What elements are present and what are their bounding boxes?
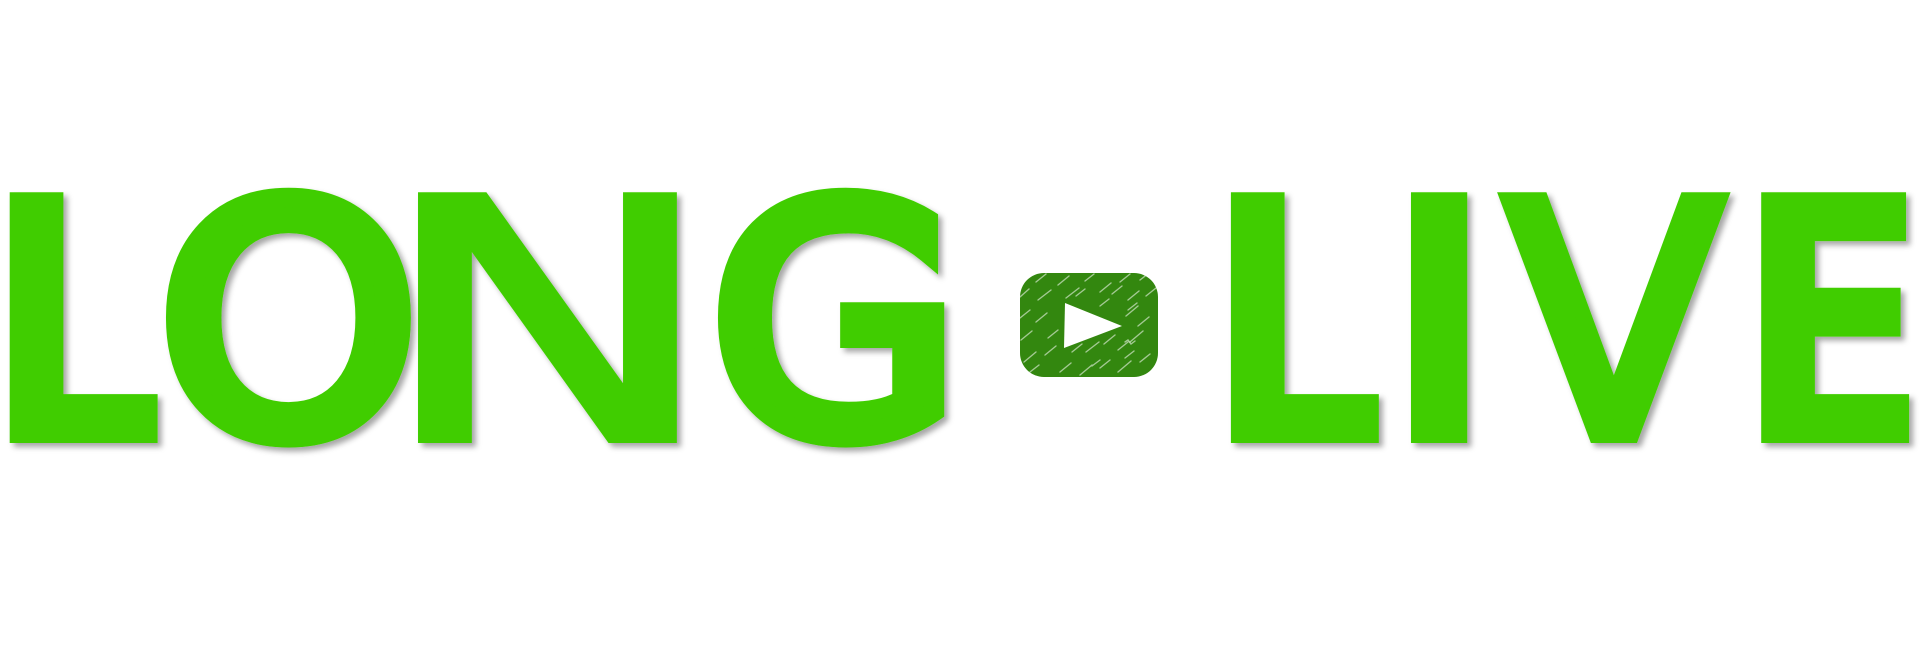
heading word: LIVE: V	[1506, 137, 1723, 512]
heading word: LIVE	[1205, 124, 1923, 525]
heading word: LONG: O	[158, 139, 419, 508]
heading word: LIVE: I	[1384, 125, 1495, 525]
heading word: LONG: N	[379, 131, 716, 518]
icon: scribbled green video play button	[1020, 273, 1158, 377]
heading word: LIVE: L	[1205, 124, 1387, 525]
heading word: LONG: G	[710, 139, 961, 508]
icon: white play triangle	[1064, 303, 1122, 348]
heading word: LONG	[0, 124, 961, 525]
